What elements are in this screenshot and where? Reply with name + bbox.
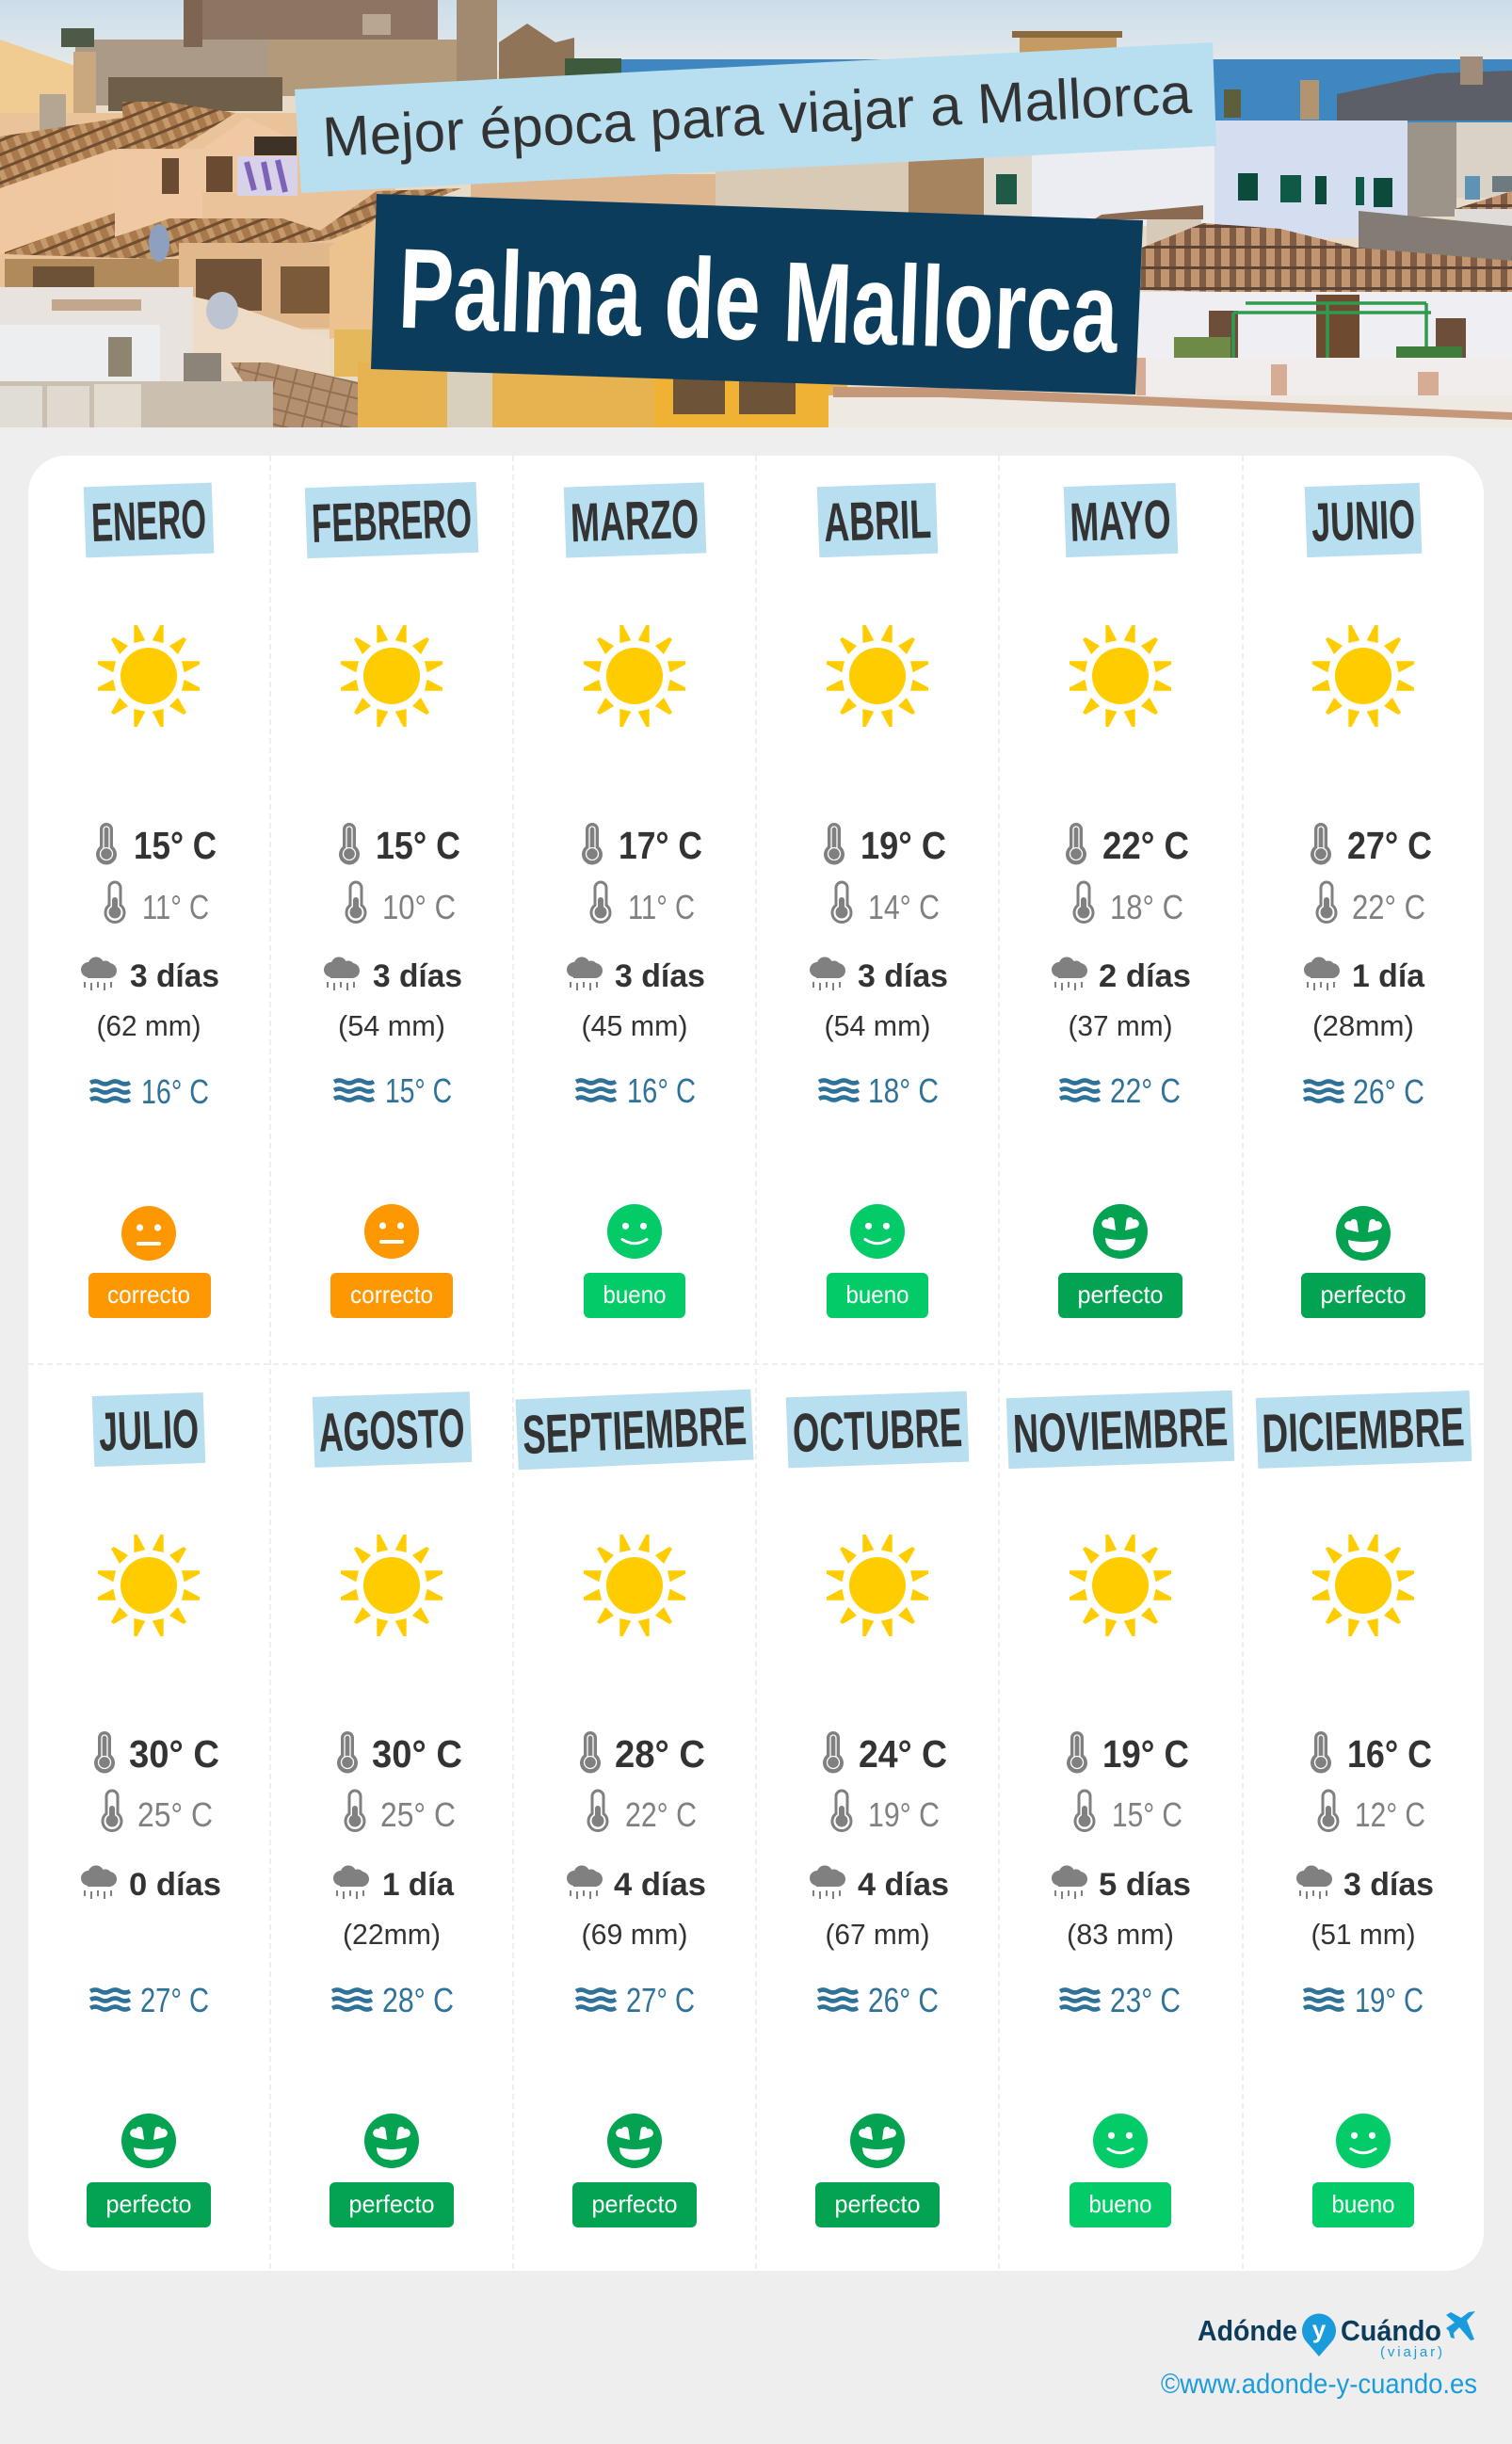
min temperature: 22° C <box>625 1795 697 1834</box>
rating badge: perfecto <box>1320 1280 1407 1309</box>
month label: FEBRERO <box>311 488 473 555</box>
max temperature: 30° C <box>372 1732 462 1776</box>
panel: julio <box>81 1392 221 2227</box>
max temperature <box>1066 823 1189 867</box>
min temperature <box>591 882 695 926</box>
rain days <box>324 957 462 994</box>
rating badge: correcto <box>107 1280 190 1309</box>
rain days: 4 días <box>614 1867 706 1903</box>
rainfall: (83 mm) <box>1067 1918 1174 1951</box>
sea temperature: 26° C <box>1353 1072 1424 1111</box>
month label <box>817 483 938 557</box>
max temperature <box>823 1731 947 1776</box>
icon: sun <box>827 625 928 727</box>
icon: sun <box>1070 1535 1171 1636</box>
month label <box>1006 1391 1234 1469</box>
max temperature <box>1067 1731 1189 1776</box>
rating face <box>1093 1204 1148 1259</box>
max temperature <box>94 1731 219 1776</box>
rating face <box>607 2114 662 2168</box>
rating face <box>121 2114 176 2168</box>
month label: AGOSTO <box>317 1397 466 1464</box>
month label: MAYO <box>1069 489 1172 554</box>
max temperature: 30° C <box>129 1732 219 1776</box>
rainfall: (37 mm) <box>1068 1009 1173 1042</box>
month label <box>313 1391 472 1468</box>
logo: Adónde y Cuándo: (viajar) <box>1380 2344 1442 2360</box>
rain days: 3 días <box>373 958 462 994</box>
panel: agosto <box>313 1391 472 2227</box>
panel: junio <box>1301 483 1432 1318</box>
icon: airplane <box>1446 2311 1475 2340</box>
rating badge: perfecto <box>348 2190 435 2218</box>
rating badge: perfecto <box>1077 1280 1164 1309</box>
rain days: 4 días <box>858 1867 949 1903</box>
sea temperature: 15° C <box>385 1071 452 1110</box>
sea temperature <box>818 1981 939 2019</box>
min temperature: 12° C <box>1355 1795 1425 1834</box>
rating badge: bueno <box>1088 2190 1152 2218</box>
rain days: 1 día <box>382 1867 455 1903</box>
rain days <box>810 957 948 994</box>
rain days <box>1052 957 1191 994</box>
sea temperature <box>334 1071 452 1110</box>
rating badge: correcto <box>350 1280 433 1309</box>
panel: febrero <box>305 482 478 1318</box>
rain days <box>333 1866 455 1903</box>
max temperature <box>337 1731 462 1776</box>
sea temperature <box>819 1071 939 1110</box>
rainfall: (54 mm) <box>825 1009 930 1042</box>
rating badge <box>584 1273 685 1318</box>
rating face <box>607 1204 662 1259</box>
rain days <box>81 957 219 994</box>
min temperature <box>346 882 456 926</box>
icon: sun <box>584 625 685 727</box>
sea temperature <box>1304 1981 1424 2019</box>
sea temperature <box>90 1072 209 1111</box>
month label: SEPTIEMBRE <box>522 1395 748 1466</box>
logo: Adónde y Cuándo <box>1198 2311 1475 2360</box>
panel: octubre <box>786 1391 969 2227</box>
rain days: 1 día <box>1352 958 1425 994</box>
rating badge <box>1312 2182 1414 2227</box>
rainfall: (69 mm) <box>582 1918 687 1951</box>
rain days <box>1052 1866 1191 1903</box>
month label: MARZO <box>570 489 700 554</box>
rainfall: (51 mm) <box>1311 1918 1416 1951</box>
icon: sun <box>341 625 442 727</box>
min temperature: 11° C <box>142 888 209 926</box>
rating badge <box>87 2182 211 2227</box>
icon: sun <box>1312 1535 1414 1636</box>
rating badge <box>330 1273 453 1318</box>
month label <box>564 482 706 558</box>
min temperature: 15° C <box>1112 1795 1182 1834</box>
max temperature <box>1311 823 1432 867</box>
sea temperature <box>332 1981 454 2019</box>
icon: sun <box>827 1535 928 1636</box>
max temperature: 24° C <box>859 1732 947 1776</box>
panel: abril <box>810 483 948 1318</box>
min temperature <box>346 1791 456 1834</box>
rainfall: (67 mm) <box>825 1918 930 1951</box>
rainfall: (54 mm) <box>338 1009 445 1042</box>
icon: map pin: y <box>1312 2315 1327 2343</box>
sea temperature <box>1060 1071 1181 1110</box>
rainfall: (62 mm) <box>96 1009 201 1042</box>
panel: climate table card <box>28 456 1484 2271</box>
sea temperature <box>576 1981 695 2019</box>
month label: ABRIL <box>823 489 932 554</box>
max temperature: 22° C <box>1102 824 1189 867</box>
icon: sun <box>584 1535 685 1636</box>
sea temperature: 28° C <box>382 1981 454 2019</box>
rain days: 2 días <box>1099 958 1191 994</box>
logo: Adónde y Cuándo: Cuándo <box>1341 2314 1441 2347</box>
icon: sun <box>1312 625 1414 727</box>
rain days <box>810 1866 949 1903</box>
subtitle banner <box>295 42 1216 193</box>
panel: noviembre <box>1006 1391 1234 2227</box>
panel: diciembre <box>1256 1391 1472 2227</box>
max temperature: 15° C <box>376 824 460 867</box>
rating badge <box>572 2182 697 2227</box>
max temperature: 27° C <box>1347 824 1432 867</box>
min temperature: 18° C <box>1110 888 1183 926</box>
min temperature: 10° C <box>382 888 456 926</box>
rain days <box>567 1866 706 1903</box>
sea temperature: 18° C <box>868 1071 939 1110</box>
rating face <box>1093 2114 1148 2168</box>
month label: ENERO <box>90 489 207 554</box>
rain days: 3 días <box>130 958 219 994</box>
min temperature <box>1317 882 1425 926</box>
rating badge: bueno <box>1331 2190 1395 2218</box>
month label <box>1305 483 1422 557</box>
title banner: Palma de Mallorca <box>396 224 1121 377</box>
min temperature <box>1074 882 1183 926</box>
rating face <box>850 2114 905 2168</box>
panel: enero <box>81 483 219 1318</box>
min temperature <box>103 1791 213 1834</box>
max temperature: 16° C <box>1347 1732 1432 1776</box>
month label: JUNIO <box>1311 489 1416 554</box>
sea temperature: 16° C <box>141 1072 209 1111</box>
min temperature <box>105 882 209 926</box>
month label: NOVIEMBRE <box>1012 1396 1229 1465</box>
rating face <box>1336 2114 1391 2168</box>
rain days <box>1304 957 1425 994</box>
max temperature <box>1311 1731 1432 1776</box>
rain days: 3 días <box>858 958 948 994</box>
website credit: ©www.adonde-y-cuando.es <box>1161 2369 1477 2400</box>
rating badge <box>1058 1273 1182 1318</box>
min temperature <box>832 882 940 926</box>
month label <box>786 1391 969 1468</box>
rating badge: bueno <box>845 1280 909 1309</box>
icon: sun <box>1070 625 1171 727</box>
title banner <box>371 194 1143 394</box>
sea temperature: 16° C <box>627 1071 696 1110</box>
month label <box>84 483 214 557</box>
max temperature <box>582 823 702 867</box>
rainfall: (28mm) <box>1312 1009 1414 1042</box>
header photo: rooftops of Palma <box>0 0 1512 427</box>
rating face <box>364 1204 419 1259</box>
icon: sun <box>98 1535 200 1636</box>
subtitle banner: Mejor época para viajar a Mallorca <box>321 62 1194 169</box>
rating badge <box>88 1273 211 1318</box>
sea temperature: 22° C <box>1110 1071 1181 1110</box>
min temperature <box>1319 1791 1425 1834</box>
max temperature <box>339 823 460 867</box>
rain days: 5 días <box>1099 1867 1191 1903</box>
rainfall: (22mm) <box>343 1918 441 1951</box>
max temperature: 19° C <box>861 824 946 867</box>
min temperature <box>1075 1791 1182 1834</box>
max temperature: 17° C <box>619 824 702 867</box>
rating badge: perfecto <box>834 2190 921 2218</box>
logo: Adónde y Cuándo: Adónde <box>1198 2314 1297 2347</box>
panel: marzo <box>564 482 706 1318</box>
month label <box>305 482 478 558</box>
panel: mayo <box>1052 483 1191 1318</box>
icon: map pin <box>1302 2314 1336 2356</box>
rating face <box>1336 1206 1391 1261</box>
max temperature: 28° C <box>615 1732 705 1776</box>
sea temperature: 23° C <box>1110 1981 1181 2019</box>
rating face <box>121 1206 176 1261</box>
rating badge: perfecto <box>591 2190 678 2218</box>
sea temperature <box>576 1071 696 1110</box>
rain days: 3 días <box>1343 1867 1434 1903</box>
min temperature: 25° C <box>380 1795 456 1834</box>
sea temperature: 27° C <box>140 1981 209 2019</box>
min temperature: 22° C <box>1352 888 1425 926</box>
min temperature: 11° C <box>628 888 695 926</box>
sea temperature: 19° C <box>1355 1981 1424 2019</box>
max temperature <box>96 823 217 867</box>
month label: JULIO <box>98 1398 200 1463</box>
rain days <box>1296 1866 1434 1903</box>
rating badge <box>815 2182 940 2227</box>
rating badge <box>1301 1273 1425 1318</box>
rating badge: perfecto <box>105 2190 192 2218</box>
month label <box>92 1392 205 1467</box>
max temperature <box>580 1731 705 1776</box>
min temperature: 25° C <box>137 1795 213 1834</box>
rating badge <box>330 2182 454 2227</box>
sea temperature <box>1304 1072 1424 1111</box>
rain days <box>567 957 705 994</box>
max temperature: 19° C <box>1102 1732 1189 1776</box>
month label <box>516 1390 754 1470</box>
min temperature: 19° C <box>868 1795 940 1834</box>
max temperature: 15° C <box>134 824 217 867</box>
rating face <box>850 1204 905 1259</box>
panel: septiembre <box>516 1390 754 2227</box>
max temperature <box>824 823 946 867</box>
month label <box>1064 483 1178 557</box>
rain days <box>81 1866 221 1903</box>
rating badge <box>827 1273 928 1318</box>
sea temperature <box>1060 1981 1181 2019</box>
sea temperature: 26° C <box>868 1981 939 2019</box>
min temperature <box>588 1791 697 1834</box>
rating face <box>364 2114 419 2168</box>
rainfall: (45 mm) <box>582 1009 687 1042</box>
icon: sun <box>341 1535 442 1636</box>
icon: sun <box>98 625 200 727</box>
min temperature: 14° C <box>868 888 940 926</box>
month label: OCTUBRE <box>792 1397 963 1464</box>
sea temperature: 27° C <box>626 1981 695 2019</box>
rating badge: bueno <box>603 1280 667 1309</box>
sea temperature <box>90 1981 209 2019</box>
min temperature <box>832 1791 940 1834</box>
rain days: 0 días <box>129 1867 221 1903</box>
rain days: 3 días <box>615 958 705 994</box>
rating badge <box>1070 2182 1171 2227</box>
